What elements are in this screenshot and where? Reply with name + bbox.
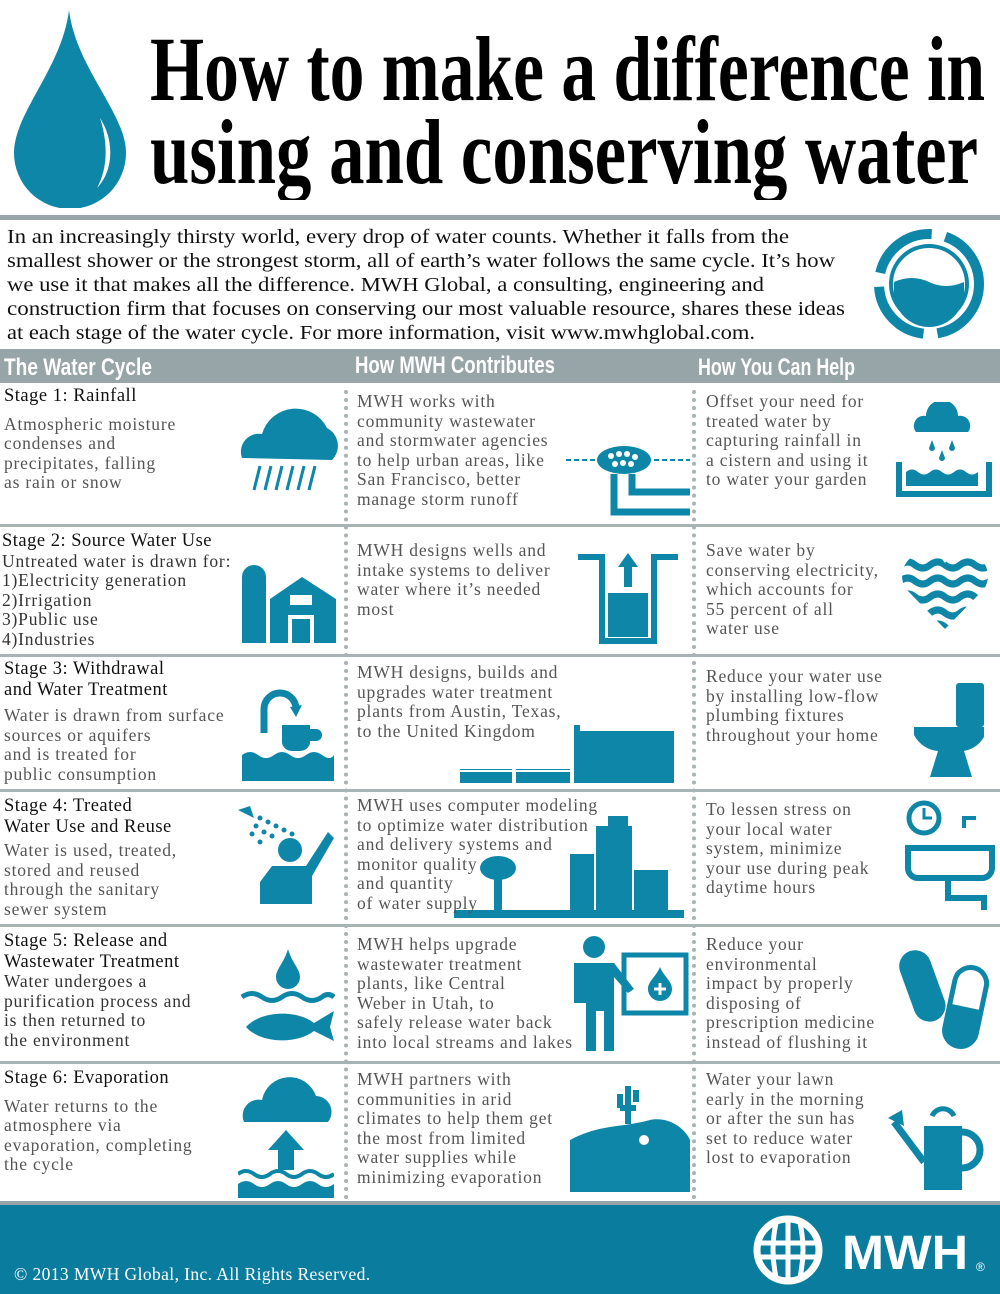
stage 3 text: Water is drawn from surface (4, 705, 224, 725)
help text 5 (706, 934, 875, 1052)
stage 3 text: Stage 3: Withdrawal (4, 659, 164, 679)
stage 3 text: sources or aquifers (4, 725, 151, 745)
help text 2: 55 percent of all (706, 599, 834, 619)
MWH text 5: Weber in Utah, to (357, 993, 495, 1013)
stage 3 text (4, 659, 224, 784)
MWH text 2: most (357, 599, 394, 619)
icon: cistern (896, 402, 992, 497)
intro text: we use it that makes all the difference. MWH Global, a consulting, engineering and (7, 275, 764, 296)
MWH text 2 (357, 540, 551, 619)
MWH text 4: monitor quality (357, 854, 477, 874)
MWH text 1: community wastewater (357, 411, 536, 431)
help text 3: throughout your home (706, 725, 879, 745)
help text 6: early in the morning (706, 1089, 864, 1109)
stage 6 text: atmosphere via (4, 1115, 122, 1135)
MWH text 6: minimizing evaporation (357, 1167, 542, 1187)
MWH text 1: MWH works with (357, 391, 496, 411)
help text 6: set to reduce water (706, 1128, 853, 1148)
stage 6 text: Stage 6: Evaporation (4, 1068, 169, 1088)
header bar: The Water Cycle (4, 354, 152, 381)
stage 6 text: Water returns to the (4, 1096, 158, 1116)
stage 2 text: 4)Industries (2, 629, 95, 649)
header bar: How You Can Help (698, 354, 855, 381)
intro text: smallest shower or the strongest storm, all of earth’s water follows the same cycle. It’s how (7, 251, 835, 272)
help text 6 (706, 1070, 864, 1168)
stage 2 text: Untreated water is drawn for: (2, 550, 231, 570)
intro text: construction firm that focuses on conserving our most valuable resource, shares these ideas (7, 299, 845, 320)
help text 6: Water your lawn (706, 1069, 834, 1089)
MWH text 4 (357, 795, 598, 913)
MWH text 5: plants, like Central (357, 973, 506, 993)
MWH text 1: to help urban areas, like (357, 450, 545, 470)
stage 5 text: is then returned to (4, 1010, 146, 1030)
MWH text 6: MWH partners with (357, 1069, 512, 1089)
MWH text 6: communities in arid (357, 1089, 512, 1109)
icon: water drop (14, 10, 126, 208)
stage 5 text: the environment (4, 1030, 130, 1050)
help text 5: environmental (706, 954, 817, 974)
help text 5: Reduce your (706, 934, 804, 954)
help text 2: Save water by (706, 540, 816, 560)
help text 5: prescription medicine (706, 1012, 875, 1032)
MWH text 6: climates to help them get (357, 1108, 553, 1128)
stage 3 text: and is treated for (4, 744, 136, 764)
icon: desert cactus (570, 1080, 690, 1192)
help text 4: your local water (706, 819, 832, 839)
help text 1: treated water by (706, 411, 832, 431)
stage 4 text: Water is used, treated, (4, 840, 177, 860)
stage 2 text (2, 531, 231, 649)
help text 4 (706, 799, 869, 897)
stage 5 text: Wastewater Treatment (4, 952, 179, 972)
logo: MWH: ® (976, 1260, 985, 1274)
MWH text 6: water supplies while (357, 1147, 517, 1167)
icon: shower person (238, 806, 334, 904)
row: stage 6 (4, 1068, 984, 1198)
icon: pills (899, 950, 990, 1049)
MWH text 3: to the United Kingdom (357, 721, 536, 741)
help text 5: impact by properly (706, 973, 854, 993)
stage 4 text: stored and reused (4, 860, 140, 880)
stage 2 text: 1)Electricity generation (2, 570, 187, 590)
help text 6: or after the sun has (706, 1108, 855, 1128)
icon: water tower city (454, 816, 684, 918)
stage 1 text: Atmospheric moisture (4, 414, 176, 434)
stage 1 text: Stage 1: Rainfall (4, 386, 137, 406)
MWH text 4: of water supply (357, 893, 478, 913)
intro text (7, 227, 845, 344)
help text 2: conserving electricity, (706, 560, 879, 580)
help text 3: plumbing fixtures (706, 705, 845, 725)
logo: MWH: MWH (842, 1227, 968, 1280)
MWH text 4: to optimize water distribution (357, 815, 589, 835)
row: stage 2 (2, 531, 988, 649)
icon: well (578, 553, 678, 644)
icon: toilet (914, 683, 984, 777)
help text 4: To lessen stress on (706, 799, 852, 819)
logo: MWH (752, 1213, 992, 1291)
stage 2 text: Stage 2: Source Water Use (2, 531, 212, 551)
stage 1 text: precipitates, falling (4, 453, 156, 473)
MWH text 5: wastewater treatment (357, 954, 522, 974)
row: stage 4 (4, 795, 995, 919)
stage 5 text: Water undergoes a (4, 971, 147, 991)
intro text: In an increasingly thirsty world, every drop of water counts. Whether it falls from the (7, 227, 789, 248)
icon: storm drain (566, 446, 690, 516)
stage 1 text (4, 386, 176, 492)
help text 4: your use during peak (706, 858, 869, 878)
MWH text 1 (357, 391, 548, 509)
stage 4 text: sewer system (4, 899, 107, 919)
help text 6: lost to evaporation (706, 1147, 851, 1167)
MWH text 6 (357, 1070, 553, 1188)
header bar: How MWH Contributes (355, 352, 555, 379)
help text 1: Offset your need for (706, 391, 864, 411)
MWH text 6: the most from limited (357, 1128, 526, 1148)
stage 4 text (4, 796, 177, 919)
icon: water cycle arrows (874, 229, 984, 339)
icon: watering can (888, 1102, 996, 1194)
MWH text 4: MWH uses computer modeling (357, 795, 598, 815)
MWH text 4: and quantity (357, 873, 454, 893)
MWH text 4: and delivery systems and (357, 834, 553, 854)
icon: farm (242, 565, 336, 643)
icon: rain cloud (240, 408, 338, 490)
stage 4 text: Stage 4: Treated (4, 796, 132, 816)
help text 5: instead of flushing it (706, 1032, 868, 1052)
stage 2 text: 3)Public use (2, 609, 99, 629)
icon: presenter (574, 936, 688, 1051)
row: stage 3 (4, 659, 984, 784)
help text 2: which accounts for (706, 579, 854, 599)
help text 4: daytime hours (706, 877, 816, 897)
MWH text 5: into local streams and lakes (357, 1032, 573, 1052)
footer (0, 1205, 1000, 1294)
MWH text 5 (357, 934, 573, 1052)
stage 2 text: 2)Irrigation (2, 590, 92, 610)
icon: evaporation (238, 1077, 334, 1198)
help text 3: Reduce your water use (706, 666, 883, 686)
help text 1: a cistern and using it (706, 450, 868, 470)
stage 6 text: evaporation, completing (4, 1135, 192, 1155)
stage 4 text: Water Use and Reuse (4, 816, 172, 836)
help text 3 (706, 666, 883, 745)
help text 2: water use (706, 618, 780, 638)
stage 6 text: the cycle (4, 1154, 74, 1174)
icon: treatment plant (460, 725, 674, 783)
MWH text 1: San Francisco, better (357, 469, 521, 489)
stage 5 text: Stage 5: Release and (4, 931, 168, 951)
help text 5: disposing of (706, 993, 802, 1013)
stage 1 text: condenses and (4, 433, 116, 453)
help text 1 (706, 391, 868, 489)
MWH text 2: MWH designs wells and (357, 540, 546, 560)
intro text: at each stage of the water cycle. For more information, visit www.mwhglobal.com. (7, 323, 755, 344)
MWH text 3: upgrades water treatment (357, 682, 553, 702)
icon: heart waves (902, 558, 988, 629)
help text 1: capturing rainfall in (706, 430, 862, 450)
row: stage 1 (4, 386, 992, 516)
header bar (0, 349, 1000, 383)
MWH text 3: MWH designs, builds and (357, 662, 558, 682)
stage 3 text: public consumption (4, 764, 157, 784)
MWH text 5: safely release water back (357, 1012, 552, 1032)
stage 4 text: through the sanitary (4, 879, 160, 899)
help text 1: to water your garden (706, 469, 867, 489)
copyright: © 2013 MWH Global, Inc. All Rights Reserved. (14, 1264, 371, 1284)
MWH text 2: water where it’s needed (357, 579, 541, 599)
MWH text 3 (357, 662, 561, 741)
stage 6 text (4, 1068, 192, 1174)
MWH text 3: plants from Austin, Texas, (357, 701, 561, 721)
title (150, 20, 985, 200)
stage 1 text: as rain or snow (4, 472, 122, 492)
icon: drop waves fish (240, 949, 336, 1041)
help text 3: by installing low-flow (706, 686, 879, 706)
icon: tap to cup (242, 690, 334, 781)
MWH text 1: manage storm runoff (357, 489, 519, 509)
MWH text 1: and stormwater agencies (357, 430, 548, 450)
help text 2 (706, 540, 879, 638)
stage 3 text: and Water Treatment (4, 680, 168, 700)
help text 4: system, minimize (706, 838, 842, 858)
row: stage 5 (4, 931, 990, 1052)
stage 5 text: purification process and (4, 991, 191, 1011)
MWH text 5: MWH helps upgrade (357, 934, 517, 954)
icon: clock sink (905, 800, 995, 910)
stage 5 text (4, 931, 191, 1050)
MWH text 2: intake systems to deliver (357, 560, 551, 580)
